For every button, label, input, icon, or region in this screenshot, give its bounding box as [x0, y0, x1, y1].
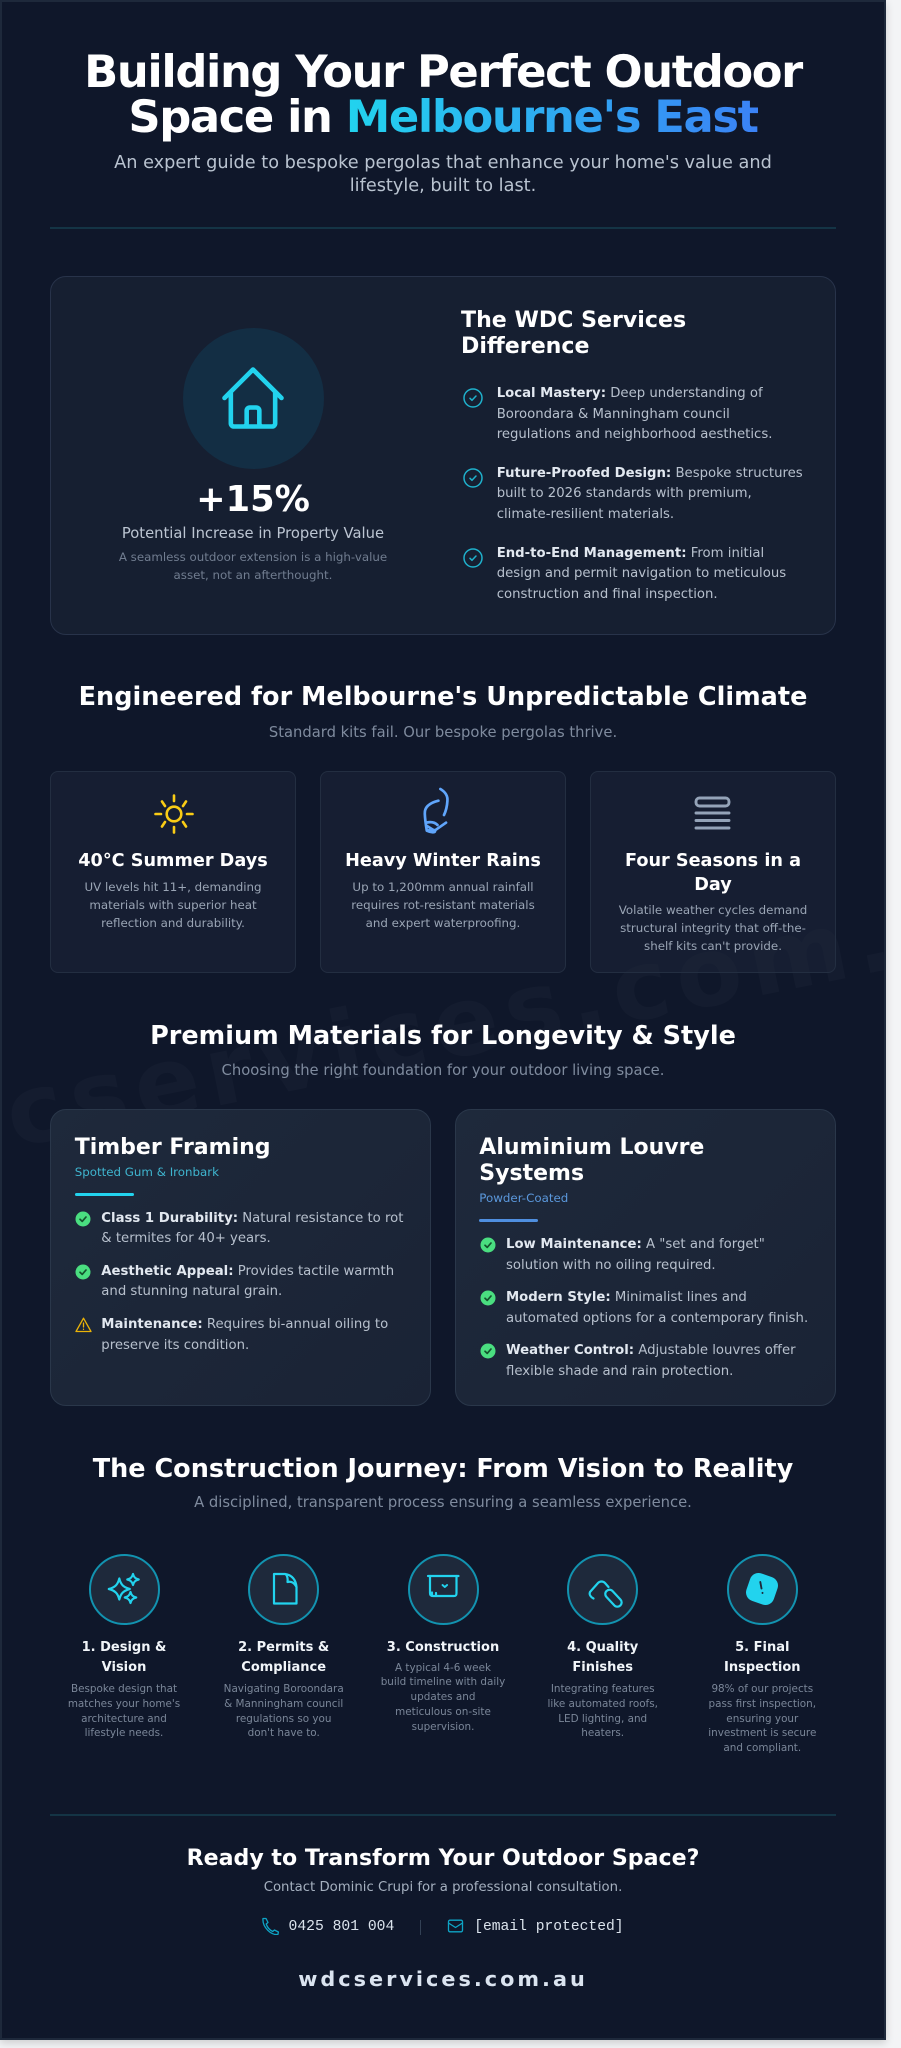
- step 1 icon: sparkles: [88, 1554, 160, 1624]
- heading: construction: The Construction Journey: From Vision to Reality: [93, 1454, 793, 1484]
- panel: hero value and difference: [50, 276, 836, 635]
- card title: seasons: Four Seasons in a: [625, 851, 801, 871]
- aluminium item: low maintenance: solution with no oiling required.: [506, 1258, 716, 1272]
- list item: end-to-end: construction and final inspection.: [497, 587, 718, 602]
- icon: green check: [480, 1290, 496, 1306]
- card title: seasons: Day: [694, 875, 732, 895]
- timber item: aesthetic: Aesthetic Appeal: Provides tactile warmth: [101, 1264, 394, 1278]
- aluminium item: modern style: [506, 1290, 808, 1326]
- panel: seasons card: [590, 771, 836, 973]
- card title: summer: 40°C Summer Days: [78, 851, 268, 871]
- step 5 text: [708, 1683, 816, 1754]
- card text: seasons: Volatile weather cycles demand: [619, 903, 807, 917]
- icon: green check: [480, 1238, 496, 1252]
- construction subtitle: A disciplined, transparent process ensuring a seamless experience.: [194, 1494, 692, 1510]
- title: [84, 45, 804, 143]
- card text: rain: [351, 880, 535, 930]
- icon: seasons stack: [694, 796, 730, 830]
- list item: end-to-end: design and permit navigation to meticulous: [497, 566, 786, 581]
- step 3 text: build timeline with daily: [381, 1676, 505, 1688]
- climate subtitle: Standard kits fail. Our bespoke pergolas thrive.: [269, 724, 617, 740]
- timber item: durability: & termites for 40+ years.: [101, 1231, 271, 1246]
- materials subtitle: Choosing the right foundation for your outdoor living space.: [222, 1062, 664, 1079]
- step 5 text: pass first inspection,: [709, 1698, 816, 1710]
- step 2 title: 2. Permits &: [238, 1640, 329, 1654]
- aluminium title: Aluminium Louvre: [479, 1135, 704, 1160]
- stat note: asset, not an afterthought.: [174, 568, 332, 582]
- step 5 text: investment is secure: [708, 1727, 816, 1739]
- aluminium item: modern style: automated options for a contemporary finish.: [506, 1310, 808, 1326]
- step 3 title: 3. Construction: [387, 1640, 499, 1654]
- icon: house in circle: [182, 328, 324, 468]
- step 4 text: like automated roofs,: [547, 1698, 658, 1710]
- timber accent: [75, 1192, 134, 1196]
- step 5 title: 5. Final: [735, 1640, 789, 1654]
- timber item: aesthetic: and stunning natural grain.: [101, 1284, 282, 1299]
- step 4 title: 4. Quality: [567, 1640, 638, 1654]
- icon: green check: [480, 1344, 496, 1358]
- card text: summer: reflection and durability.: [101, 916, 245, 930]
- aluminium item: weather control: flexible shade and rain protection.: [506, 1364, 733, 1379]
- panel: summer card: [50, 771, 296, 973]
- step 5 text: and compliant.: [723, 1742, 801, 1754]
- icon: rain: [423, 788, 449, 834]
- aluminium item: low maintenance: Low Maintenance: A "set and forget": [506, 1237, 765, 1252]
- heading: climate: Engineered for Melbourne's Unpredictable Climate: [79, 682, 807, 712]
- email: [email protected]: [474, 1918, 624, 1934]
- footer heading: Ready to Transform Your Outdoor Space?: [187, 1845, 699, 1871]
- footer contact line: Contact Dominic Crupi for a professional consultation.: [264, 1880, 622, 1894]
- icon: phone: [262, 1918, 279, 1935]
- step 4 text: [547, 1683, 658, 1739]
- step 5 text: 98% of our projects: [711, 1683, 813, 1695]
- card text: rain: Up to 1,200mm annual rainfall: [352, 880, 534, 894]
- list item: local mastery: Boroondara & Manningham council: [497, 407, 730, 422]
- step 1 text: architecture and: [81, 1713, 167, 1725]
- aluminium title: [479, 1135, 704, 1186]
- step 3 text: [381, 1662, 505, 1733]
- subtitle: An expert guide to bespoke pergolas that enhance your home's value and: [114, 152, 772, 172]
- aluminium item: weather control: Weather Control: Adjustable louvres offer: [506, 1343, 796, 1358]
- subtitle: [114, 152, 772, 196]
- card text: seasons: structural integrity that off-the-: [620, 921, 806, 935]
- heading: WDC difference: The WDC Services: [461, 307, 686, 333]
- timber subtitle: Spotted Gum & Ironbark: [75, 1165, 219, 1179]
- list item: end-to-end: [497, 546, 786, 602]
- timber item: aesthetic: [101, 1264, 394, 1299]
- step 3 text: supervision.: [412, 1721, 474, 1733]
- stat label: Potential Increase in Property Value: [122, 525, 384, 542]
- aluminium item: weather control: [506, 1343, 796, 1379]
- step 3 text: meticulous on-site: [395, 1706, 491, 1718]
- title: Building Your Perfect Outdoor: [84, 45, 802, 98]
- step 4 icon: hook and pill: [567, 1554, 638, 1624]
- aluminium accent: [479, 1219, 538, 1222]
- list item: future-proofed: built to 2026 standards with premium,: [497, 486, 752, 501]
- list item: future-proofed: climate-resilient materials.: [497, 507, 674, 522]
- heading: materials: Premium Materials for Longevity & Style: [150, 1020, 736, 1050]
- step 4 title: [567, 1640, 638, 1675]
- step 4 text: Integrating features: [551, 1683, 655, 1695]
- website: wdcservices.com.au: [298, 1967, 588, 1991]
- step 4 text: heaters.: [581, 1727, 624, 1739]
- heading: WDC difference: Difference: [461, 333, 590, 359]
- step 2 text: don't have to.: [248, 1727, 320, 1739]
- title: Space in Melbourne's East: [128, 90, 758, 143]
- step 1 title: Vision: [102, 1660, 146, 1675]
- stat: +15%: +15%: [196, 478, 310, 520]
- card text: rain: requires rot-resistant materials: [351, 898, 535, 912]
- step 2 title: [238, 1640, 329, 1675]
- step 2 title: Compliance: [241, 1660, 326, 1675]
- step 4 title: Finishes: [572, 1660, 633, 1675]
- timber item: durability: [101, 1210, 404, 1246]
- contact separator: [420, 1920, 421, 1935]
- card title: seasons: [625, 851, 801, 895]
- step 1 title: [82, 1640, 166, 1675]
- step 2 icon: document: [248, 1554, 319, 1624]
- timber title: Timber Framing: [75, 1135, 271, 1160]
- timber item: durability: Class 1 Durability: Natural resistance to rot: [101, 1210, 403, 1226]
- step 5 title: [724, 1640, 801, 1675]
- timber item: maintenance: Maintenance: Requires bi-annual oiling to: [101, 1317, 388, 1332]
- panel: timber: [50, 1109, 431, 1406]
- list item: future-proofed: Future-Proofed Design: Bespoke structures: [497, 466, 803, 481]
- icon: green check: [76, 1212, 90, 1226]
- icon: check 3: [463, 548, 483, 568]
- card text: rain: and expert waterproofing.: [366, 916, 520, 930]
- list item: local mastery: regulations and neighborhood aesthetics.: [497, 427, 772, 442]
- list item: local mastery: [497, 386, 772, 442]
- step 1 text: [68, 1683, 180, 1739]
- icon: check 2: [463, 468, 483, 488]
- subtitle: lifestyle, built to last.: [350, 176, 536, 196]
- aluminium item: low maintenance: [506, 1237, 765, 1272]
- step 1 text: Bespoke design that: [71, 1683, 177, 1695]
- step 3 text: updates and: [411, 1691, 475, 1703]
- timber item: maintenance: preserve its condition.: [101, 1338, 249, 1352]
- icon: warning: [75, 1318, 92, 1332]
- aluminium item: modern style: Modern Style: Minimalist lines and: [506, 1290, 747, 1305]
- step 1 text: lifestyle needs.: [85, 1727, 163, 1739]
- list item: end-to-end: End-to-End Management: From initial: [497, 546, 764, 561]
- list item: future-proofed: [497, 466, 803, 522]
- step 4 text: LED lighting, and: [558, 1713, 647, 1725]
- panel: rain card: [320, 771, 566, 973]
- icon: green check: [76, 1264, 90, 1280]
- step 5 text: ensuring your: [726, 1713, 798, 1725]
- phone number: 0425 801 004: [288, 1918, 394, 1934]
- step 1 title: 1. Design &: [82, 1640, 166, 1654]
- step 2 text: [224, 1683, 344, 1739]
- aluminium subtitle: Powder-Coated: [479, 1191, 568, 1205]
- step 2 text: Navigating Boroondara: [224, 1683, 344, 1695]
- icon: mail: [447, 1918, 464, 1932]
- step 2 text: regulations so you: [236, 1713, 332, 1725]
- step 1 text: matches your home's: [68, 1698, 180, 1710]
- card text: seasons: shelf kits can't provide.: [644, 939, 782, 953]
- card text: seasons: [618, 903, 807, 953]
- step 2 text: & Manningham council: [224, 1698, 343, 1710]
- timber item: maintenance: [101, 1317, 388, 1352]
- step 5 title: Inspection: [724, 1660, 801, 1675]
- heading: WDC difference: [461, 307, 686, 359]
- icon: check 1: [463, 388, 483, 408]
- icon: sun: [154, 794, 194, 834]
- panel: aluminium: [455, 1109, 836, 1406]
- card text: summer: UV levels hit 11+, demanding: [84, 880, 262, 894]
- step 3 icon: tray: [408, 1554, 478, 1624]
- stat note: A seamless outdoor extension is a high-value: [119, 550, 387, 564]
- step 5 icon: badge: [727, 1554, 798, 1624]
- step 3 text: A typical 4-6 week: [395, 1662, 491, 1674]
- card text: summer: [84, 880, 262, 930]
- stat note: [119, 550, 387, 582]
- card text: summer: materials with superior heat: [89, 898, 257, 912]
- list item: local mastery: Local Mastery: Deep understanding of: [497, 386, 763, 401]
- aluminium title: Systems: [479, 1161, 584, 1186]
- card title: rain: Heavy Winter Rains: [345, 851, 541, 871]
